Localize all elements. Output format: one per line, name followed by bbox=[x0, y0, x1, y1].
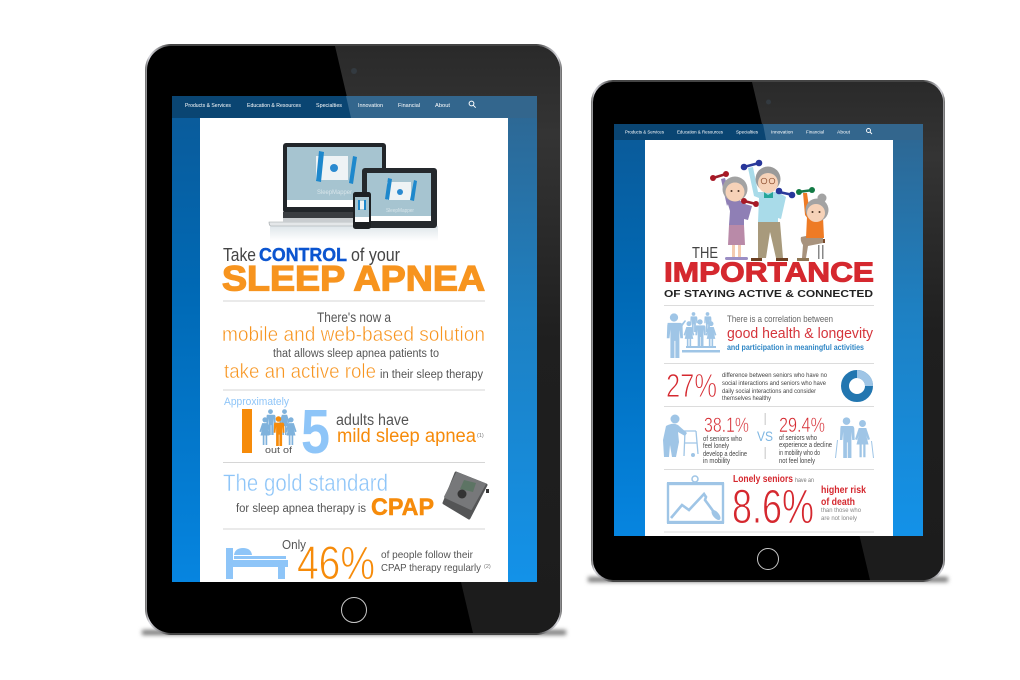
section: mobility comparison: of seniors who bbox=[703, 436, 742, 443]
section: lonely seniors risk of death: are not lonely bbox=[821, 515, 858, 522]
statistic: 1 out of 5 adults: out of bbox=[265, 445, 292, 456]
section: mobility comparison: of seniors who bbox=[779, 435, 817, 442]
text block: solution description: mobile and web-based solution bbox=[222, 324, 485, 346]
icon: CPAP machine bbox=[444, 473, 489, 518]
section: lonely seniors risk of death: higher risk bbox=[821, 484, 866, 496]
section: mobility comparison: in mobility who do bbox=[779, 450, 820, 457]
statistic: 46 percent follow therapy: 46% bbox=[297, 536, 375, 589]
donut chart bbox=[845, 370, 873, 398]
section: mobility comparison: 38.1% bbox=[704, 414, 749, 437]
section: good health and longevity: There is a correlation between bbox=[727, 314, 833, 325]
camera bbox=[766, 100, 771, 104]
section: 27 percent difference: 27% bbox=[666, 367, 717, 404]
section: lonely seniors risk of death: Lonely seniors bbox=[733, 474, 793, 485]
heading: take control of your sleep apnea: SLEEP APNEA bbox=[222, 260, 485, 298]
section: mobility comparison: not feel lonely bbox=[779, 458, 815, 465]
tablet: left bbox=[142, 44, 566, 635]
tablet shadow bbox=[142, 630, 566, 635]
heading: take control of your sleep apnea bbox=[222, 245, 485, 298]
screen background bbox=[614, 124, 923, 536]
statistic: 1 out of 5 adults: adults have bbox=[336, 412, 409, 429]
text block: solution description: There's now a bbox=[317, 309, 391, 325]
navigation bar: Innovation bbox=[771, 130, 793, 136]
statistic: 1 out of 5 adults bbox=[224, 396, 484, 467]
section: lonely seniors risk of death bbox=[667, 474, 866, 534]
section: mobility comparison: in mobility bbox=[703, 458, 730, 465]
heading: take control of your sleep apnea: of your bbox=[351, 245, 400, 265]
statistic: 1 out of 5 adults: mild sleep apnea bbox=[337, 426, 476, 447]
screen background bbox=[172, 96, 537, 582]
text block: solution description bbox=[222, 309, 485, 383]
navigation bar: Specialties bbox=[316, 103, 342, 109]
navigation bar: Education & Resources bbox=[677, 130, 724, 136]
icon: bed bbox=[226, 548, 288, 579]
text block: solution description: take an active role bbox=[224, 361, 376, 383]
icon: search bbox=[469, 101, 476, 108]
statistic: 1 out of 5 adults: Approximately bbox=[224, 396, 289, 408]
statistic: 46 percent follow therapy bbox=[226, 536, 491, 589]
section: 27 percent difference: daily social interactions and consider bbox=[722, 388, 817, 395]
section: lonely seniors risk of death: of death bbox=[821, 496, 855, 508]
statistic: 46 percent follow therapy: (2) bbox=[484, 564, 491, 570]
section: mobility comparison: 29.4% bbox=[779, 414, 825, 437]
scene: two tablets showing infographics bbox=[139, 44, 951, 638]
tablet body bbox=[145, 44, 562, 635]
icon: group of people bbox=[259, 409, 297, 446]
statistic: gold standard CPAP: CPAP bbox=[371, 494, 434, 521]
navigation bar: Specialties bbox=[736, 130, 759, 136]
navigation bar: About bbox=[435, 103, 450, 109]
section: mobility comparison: experience a decline bbox=[779, 442, 832, 449]
man with blue dumbbells bbox=[741, 160, 795, 261]
navigation bar: Financial bbox=[806, 130, 824, 136]
statistic: 46 percent follow therapy: CPAP therapy regularly bbox=[381, 562, 482, 574]
tablet shadow bbox=[588, 577, 948, 582]
icon: search bbox=[866, 128, 872, 134]
heading: the importance of staying active and connected: OF STAYING ACTIVE & CONNECTED bbox=[664, 288, 873, 300]
icon: devices running SleepMapper: SleepMapper bbox=[317, 189, 353, 196]
section: mobility comparison bbox=[663, 413, 874, 465]
tablet: right bbox=[588, 80, 948, 582]
section: lonely seniors risk of death: have an bbox=[795, 477, 814, 484]
statistic: 1 out of 5 adults: (1) bbox=[477, 433, 484, 439]
statistic: gold standard CPAP: The gold standard bbox=[223, 470, 388, 497]
icon: devices running SleepMapper: SleepMapper bbox=[386, 208, 414, 214]
icon: person with walker bbox=[663, 414, 698, 457]
section: 27 percent difference: themselves healthy bbox=[722, 395, 772, 402]
section: good health and longevity bbox=[667, 312, 873, 358]
heading: the importance of staying active and connected: IMPORTANCE bbox=[664, 256, 874, 288]
home button bbox=[758, 548, 778, 570]
navigation bar: Innovation bbox=[358, 103, 383, 109]
section: good health and longevity: good health & longevity bbox=[727, 325, 873, 342]
text block: solution description: in their sleep therapy bbox=[380, 369, 483, 381]
text block: solution description: that allows sleep apnea patients to bbox=[273, 348, 439, 360]
glass reflection bbox=[752, 82, 943, 580]
section: mobility comparison: feel lonely bbox=[703, 443, 729, 450]
navigation bar: About bbox=[837, 130, 851, 136]
woman with red dumbbells bbox=[710, 171, 759, 260]
navigation bar: Products & Services bbox=[185, 103, 231, 109]
heading: the importance of staying active and connected: THE bbox=[692, 245, 718, 262]
illustration: three seniors with dumbbells bbox=[710, 160, 828, 261]
section: 27 percent difference: social interactions and seniors who have bbox=[722, 380, 826, 387]
icon: elderly couple bbox=[835, 417, 874, 458]
icon: falling line chart on board bbox=[667, 476, 724, 524]
icon: leader with group bbox=[667, 312, 720, 358]
heading: take control of your sleep apnea: Take bbox=[223, 245, 256, 265]
statistic: gold standard CPAP: for sleep apnea therapy is bbox=[236, 503, 366, 515]
navigation bar: Education & Resources bbox=[247, 103, 301, 109]
statistic: gold standard CPAP bbox=[223, 470, 489, 521]
section: lonely seniors risk of death: than those who bbox=[821, 507, 861, 514]
navigation bar: Financial bbox=[398, 103, 420, 109]
navigation bar: Products & Services bbox=[625, 130, 665, 136]
section: 27 percent difference bbox=[666, 367, 873, 404]
section: mobility comparison: VS bbox=[757, 428, 773, 444]
panel: sleep apnea infographic bbox=[200, 118, 508, 589]
seated woman with green dumbbell bbox=[796, 187, 828, 261]
home button bbox=[342, 598, 366, 622]
section: good health and longevity: and participation in meaningful activities bbox=[727, 342, 864, 352]
icon: devices running SleepMapper bbox=[269, 143, 438, 241]
heading: take control of your sleep apnea: CONTROL bbox=[259, 245, 347, 265]
statistic: 1 out of 5 adults: 5 bbox=[301, 398, 330, 467]
navigation bar bbox=[172, 96, 537, 118]
panel: staying active infographic bbox=[645, 140, 893, 536]
tablet body bbox=[591, 80, 945, 582]
navigation bar bbox=[614, 124, 923, 140]
glass reflection bbox=[335, 46, 560, 633]
heading: the importance of staying active and connected bbox=[664, 245, 874, 300]
section: 27 percent difference: difference between seniors who have no bbox=[722, 372, 827, 379]
statistic: 46 percent follow therapy: Only bbox=[282, 537, 306, 552]
statistic: 46 percent follow therapy: of people follow their bbox=[381, 549, 473, 561]
section: mobility comparison: develop a decline bbox=[703, 451, 747, 458]
section: lonely seniors risk of death: 8.6% bbox=[732, 481, 814, 534]
camera bbox=[351, 68, 357, 74]
